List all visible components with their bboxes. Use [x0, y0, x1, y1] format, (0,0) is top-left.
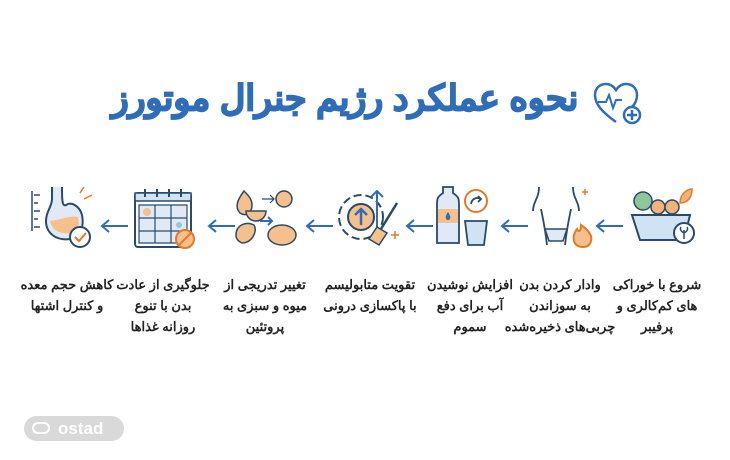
caption: step 7: و کنترل اشتها — [31, 298, 103, 313]
arrow 1 — [596, 219, 623, 233]
icon: fruits to protein — [235, 190, 297, 246]
arrow 2 — [500, 219, 528, 233]
caption: step 6: روزانه غذاها — [131, 319, 195, 334]
icon: food calendar — [134, 189, 195, 249]
logo: ostad — [24, 416, 124, 441]
icon: body burning fat — [532, 187, 592, 248]
caption: step 1: شروع با خوراکی — [613, 277, 701, 292]
title: نحوه عملکرد رژیم جنرال موتورز — [112, 79, 578, 118]
logo: ostad: ostad — [58, 419, 103, 438]
caption: step 3 — [427, 277, 513, 334]
icon: gear with broom — [338, 190, 399, 246]
icon: heart with pulse — [594, 82, 642, 124]
caption: step 3: افزایش نوشیدن — [427, 277, 513, 292]
caption: step 2: وادار کردن بدن — [519, 277, 601, 292]
caption: step 4: تقویت متابولیسم — [325, 277, 415, 292]
caption: step 6 — [116, 277, 210, 334]
caption: step 5: تغییر تدریجی از — [224, 277, 306, 292]
arrow 6 — [100, 219, 128, 233]
caption: step 3: سموم — [453, 319, 487, 334]
caption: step 5: میوه و سبزی به — [223, 298, 307, 313]
icon: stomach with check — [31, 186, 92, 248]
caption: step 2: چربی‌های ذخیره‌شده — [505, 319, 615, 334]
caption: step 4 — [323, 277, 417, 314]
caption: step 1 — [613, 277, 701, 334]
caption: step 1: های کم‌کالری و — [617, 298, 697, 313]
caption: step 2: به سوزاندن — [529, 298, 591, 313]
caption: step 4: با پاکسازی درونی — [323, 298, 417, 313]
caption: step 5: پروتئین — [246, 319, 284, 334]
arrow 3 — [406, 219, 433, 233]
caption: step 5 — [223, 277, 307, 334]
caption: step 7 — [21, 277, 114, 314]
icon: water bottle and glass — [436, 186, 488, 246]
caption: step 6: بدن با تنوع — [135, 298, 191, 313]
caption: step 3: آب برای دفع — [437, 298, 503, 313]
arrow 4 — [306, 219, 333, 233]
caption: step 1: پرفیبر — [641, 319, 673, 334]
caption: step 6: جلوگیری از عادت — [116, 277, 210, 292]
icon: basket of vegetables — [630, 188, 695, 244]
caption: step 7: کاهش حجم معده — [21, 277, 113, 292]
caption: step 2 — [505, 277, 615, 334]
arrow 5 — [208, 219, 235, 233]
